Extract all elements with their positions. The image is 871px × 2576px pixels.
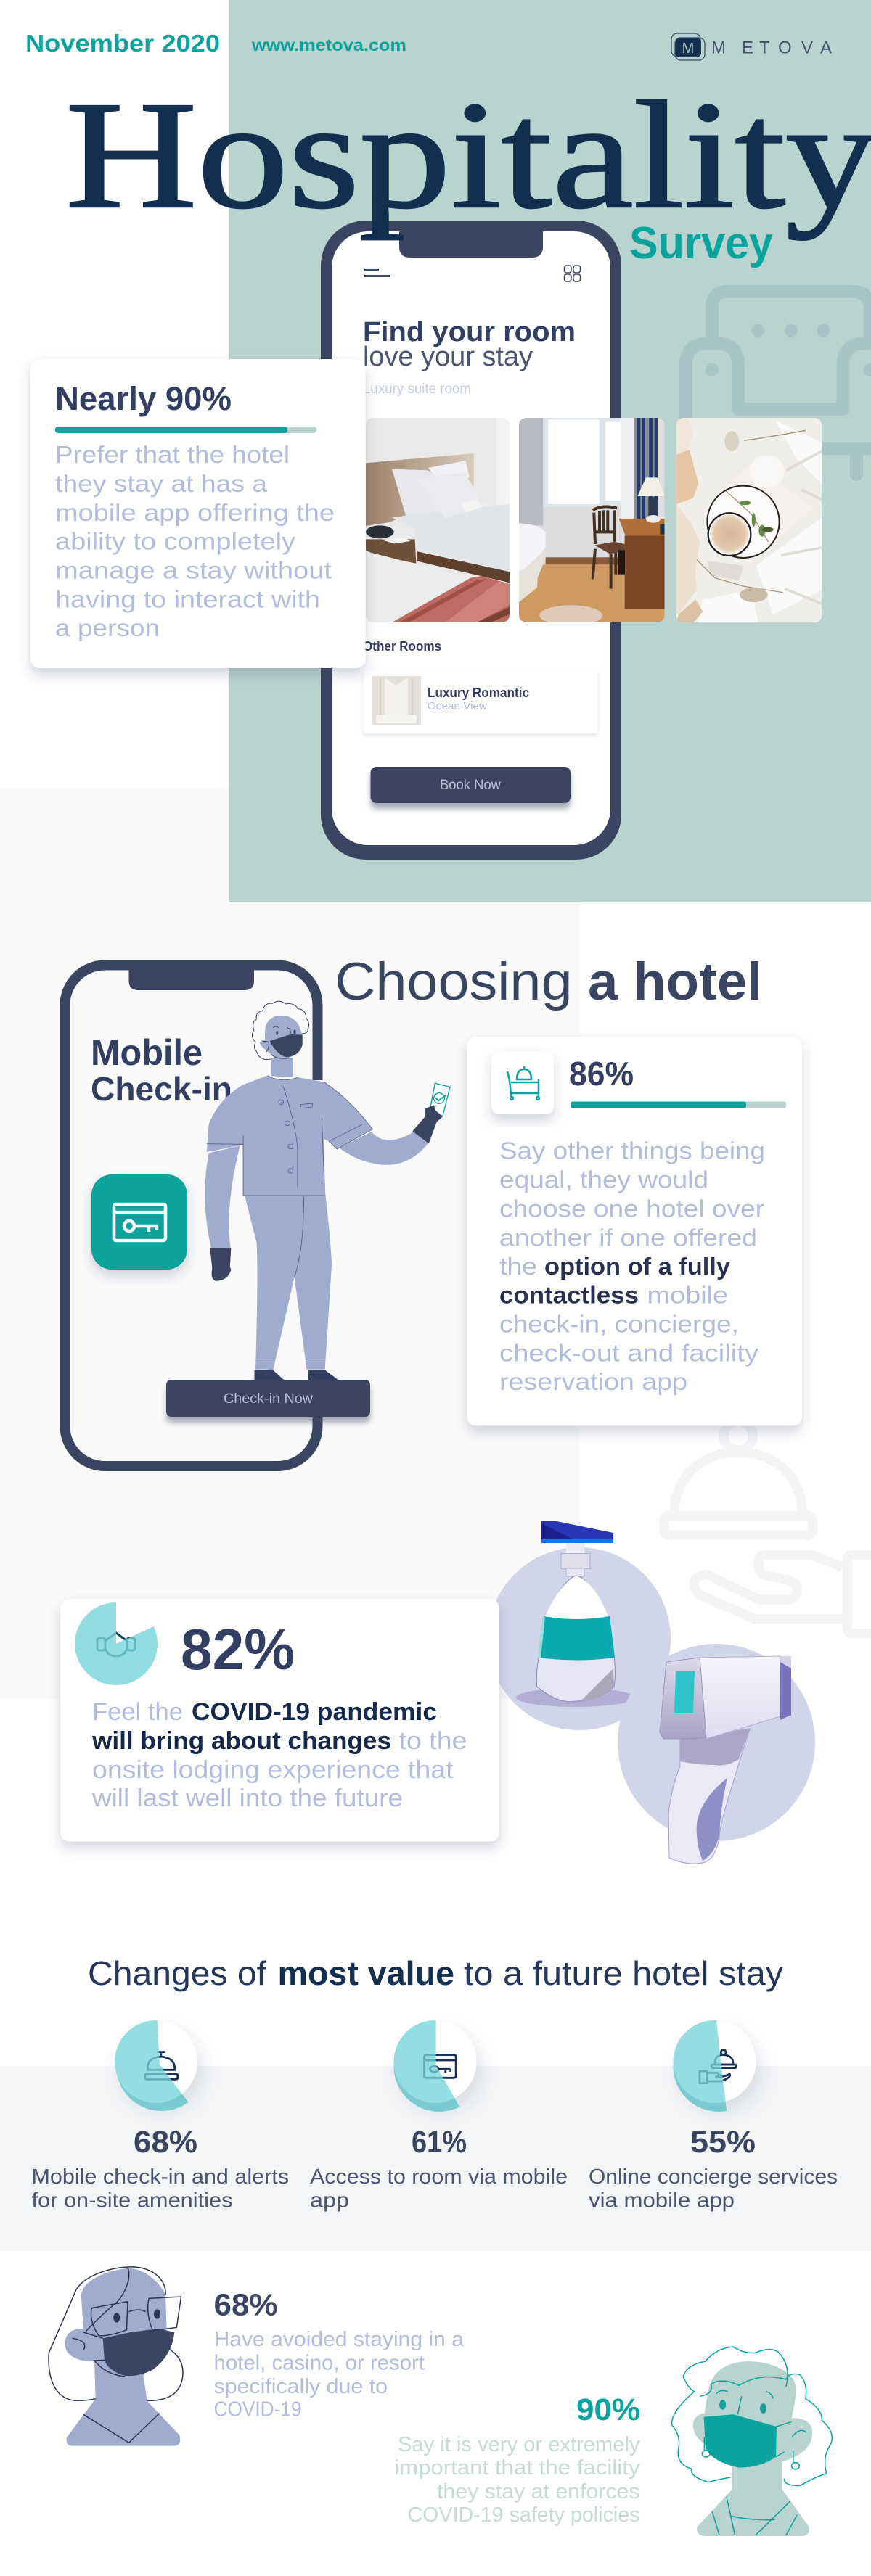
icon: key card pie [393,2020,485,2112]
body text: manage a stay without [55,557,332,583]
icon: ghost cloche and hand [664,1421,871,1634]
stat: 68% mobile check-in [32,2020,289,2213]
photo: hotel room desk [519,418,665,625]
section heading: changes of most value: to a future hotel stay [464,1954,783,1992]
phone notch [129,965,254,990]
body text: mobile app offering the [55,499,335,526]
background: teal header panel [229,0,871,902]
body text: check-in, concierge, [499,1310,739,1338]
room card [364,670,597,733]
card: nearly 90% [30,359,366,668]
background: grey stats band [0,2066,871,2251]
stat: 82%: 82% [181,1617,295,1682]
section heading: changes of most value: most value [277,1954,454,1992]
body text: equal, they would [499,1166,708,1193]
body text: ability to completely [55,528,296,554]
stat: 86%: 86% [569,1055,634,1092]
body text: option of a fully [544,1253,731,1280]
body text: choose one hotel over [499,1196,764,1222]
phone: hotel booking app [321,221,621,860]
stat: 68% avoided hotels: 68% [213,2288,277,2323]
icon: key card tile [91,1174,187,1270]
app heading: Find your room [363,317,576,347]
button: book now: Book Now [440,778,501,793]
body text: to the [399,1727,467,1755]
illustration: hand sanitizer bottle [488,1521,671,1730]
phone: mobile check-in [65,965,370,1466]
progress bar [55,427,316,433]
legs and left arm [205,1145,339,1380]
stat: 90% safety policies: Say it is very or extremely [398,2433,640,2456]
body text: will bring about changes [91,1727,391,1755]
body text: COVID-19 pandemic [192,1698,437,1726]
stat: 90% safety policies: COVID-19 safety policies [408,2503,640,2527]
body text [55,441,335,641]
app subheading: love your stay [363,342,533,372]
phone heading [91,1032,232,1108]
stat: 68% avoided hotels [213,2288,465,2421]
room card: Ocean View [428,700,487,712]
illustration: woman with curly hair and teal mask [672,2347,832,2536]
stat: 61% access to room: 61% [412,2125,467,2160]
button: check-in now [166,1380,370,1417]
illustration: infrared thermometer [618,1644,815,1864]
stat: 55% online concierge: via mobile app [589,2189,735,2213]
stat: 61% access to room: app [310,2189,349,2213]
body text [91,1698,467,1812]
logo: Metova: M [682,41,694,57]
body text: having to interact with [55,586,320,612]
stat: 90% safety policies: important that the facility [394,2456,640,2480]
body text: check-out and facility [499,1339,759,1367]
illustration: masked staff member [205,1001,450,1380]
photo: hotel bed [366,418,510,622]
body text: mobile [647,1281,728,1309]
button: check-in now: Check-in Now [224,1391,313,1407]
body text [499,1137,765,1395]
logo: Metova [671,33,832,60]
illustration: woman with glasses and mask [49,2267,183,2446]
icon: room service trolley [491,1051,554,1114]
body text: reservation app [499,1368,687,1395]
section heading: choosing a hotel [335,952,762,1011]
room card: Luxury Romantic [428,685,529,700]
phone heading: Check-in [91,1070,232,1108]
body text: the [499,1253,537,1280]
stat: 55% online concierge [589,2020,838,2213]
section heading: choosing a hotel: a hotel [588,952,762,1011]
title: Hospitality [65,70,871,240]
icon: mask in 82% pie [75,1602,158,1685]
photo: coffee on bed [676,418,822,622]
stat: 90% safety policies [394,2392,640,2527]
stat: 61% access to room [310,2020,568,2213]
stat: 68% avoided hotels: specifically due to [213,2375,388,2398]
stat: 61% access to room: Access to room via mobile [310,2165,568,2189]
body text: a person [55,614,160,641]
body text: Say other things being [499,1137,765,1164]
progress bar [571,1101,786,1108]
stat: 90% safety policies: they stay at enforces [437,2480,640,2503]
stat: 68% avoided hotels: Have avoided staying in a [213,2328,465,2351]
body text: Feel the [92,1698,183,1726]
card: 82% [60,1599,499,1841]
body text: another if one offered [499,1225,757,1251]
stat: 68% mobile check-in: 68% [134,2125,197,2160]
stat: 90% safety policies: 90% [576,2392,640,2427]
body text: onsite lodging experience that [92,1756,454,1784]
stat: nearly 90%: Nearly 90% [55,380,232,417]
date: November 2020 [25,30,220,57]
body text: contactless [499,1281,639,1309]
room thumbnail [372,676,421,725]
stat: 68% mobile check-in: Mobile check-in and alerts [32,2165,289,2189]
other rooms label: Other Rooms [363,639,441,654]
icon: grid [565,266,581,281]
body text: Prefer that the hotel [55,441,290,468]
stat: 55% online concierge: Online concierge services [589,2165,838,2189]
card: 86% contactless [467,1037,802,1426]
section heading: changes of most value [88,1954,783,1992]
background: light grey panel [0,788,580,1699]
logo: Metova: METOVA [711,38,832,58]
body text: will last well into the future [91,1785,403,1812]
subtitle: survey: Survey [629,218,773,268]
phone notch [399,231,543,258]
phone heading: Mobile [91,1032,203,1073]
torso and head [207,1001,450,1196]
stat: 68% avoided hotels: COVID-19 [213,2398,302,2421]
icon: bell and hand pie [674,2020,764,2112]
body text: they stay at has a [55,470,268,497]
icon: reception bell pie [115,2020,207,2111]
stat: 55% online concierge: 55% [690,2125,756,2160]
stat: 68% mobile check-in: for on-site amenities [32,2189,232,2213]
stat: 68% avoided hotels: hotel, casino, or resort [213,2352,425,2375]
icon: menu [364,269,390,277]
app caption: Luxury suite room [363,382,471,397]
button: book now [370,767,571,803]
section heading: choosing a hotel: Choosing [335,952,572,1011]
section heading: changes of most value: Changes of [88,1954,266,1992]
website: www.metova.com [251,36,406,54]
icon: ghost armchair [686,292,871,474]
